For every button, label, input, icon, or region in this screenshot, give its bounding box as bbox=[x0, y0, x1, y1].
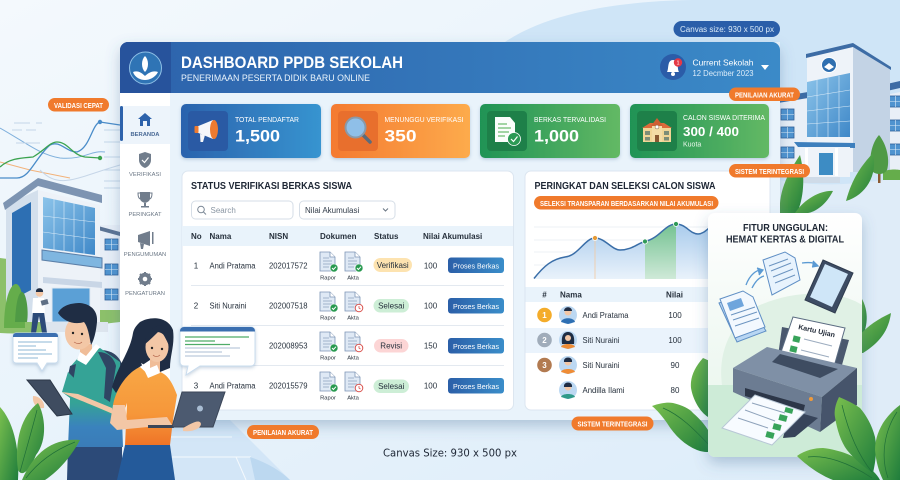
tag: penilaian akurat top: PENILAIAN AKURAT bbox=[735, 92, 795, 99]
subtitle: PENERIMAAN PESERTA DIDIK BARU ONLINE bbox=[181, 73, 370, 84]
chat bubble over table bbox=[180, 327, 255, 375]
table row 2: Rapor bbox=[320, 316, 336, 322]
line chart bbox=[534, 222, 712, 279]
tag: sistem terintegrasi top: SISTEM TERINTEGRASI bbox=[735, 169, 804, 176]
icon: paper document center bbox=[763, 252, 800, 295]
table row 4 bbox=[194, 372, 504, 402]
stat card: calon siswa diterima: 300 / 400 bbox=[683, 124, 739, 139]
table row 4: Proses Berkas bbox=[453, 382, 499, 391]
icon: shield bbox=[139, 152, 151, 168]
stat card: berkas tervalidasi bbox=[480, 104, 620, 158]
table row 1: Verifikasi bbox=[377, 261, 409, 270]
user info: Current Sekolah bbox=[692, 58, 754, 68]
heading bbox=[726, 222, 844, 246]
table row 1: 202017572 bbox=[269, 262, 308, 270]
table row 2: Siti Nuraini bbox=[210, 302, 247, 310]
stat card: berkas tervalidasi: BERKAS TERVALIDASI bbox=[534, 115, 606, 124]
icon: gear bbox=[138, 272, 152, 286]
ranking table header: Nilai bbox=[666, 290, 683, 300]
table row 4: Selesai bbox=[378, 382, 405, 391]
icon: document check bbox=[495, 117, 520, 146]
tablet bbox=[27, 380, 72, 416]
ranking row 4: Andilla Ilami bbox=[582, 386, 625, 395]
subtitle pill bbox=[534, 196, 718, 210]
table row 1: Proses Berkas bbox=[453, 261, 499, 270]
table row 4: 3 bbox=[194, 382, 199, 390]
search box: Search bbox=[210, 206, 236, 215]
label: verifikasi: VERIFIKASI bbox=[129, 172, 161, 178]
ranking row 2: 2 bbox=[542, 336, 547, 345]
arrows bbox=[746, 261, 818, 288]
subtitle pill: SELEKSI TRANSPARAN BERDASARKAN NILAI AKUMULASI bbox=[540, 201, 713, 208]
label: pengumuman: PENGUMUMAN bbox=[124, 252, 166, 258]
table row 1 bbox=[194, 252, 504, 282]
icon: tablet bbox=[805, 260, 853, 313]
tag: validasi cepat: VALIDASI CEPAT bbox=[54, 103, 104, 110]
icon: notification bell bbox=[660, 54, 686, 80]
table row 2 bbox=[194, 292, 504, 322]
tag: penilaian akurat bottom: PENILAIAN AKURAT bbox=[253, 430, 314, 437]
tag: canvas size top bbox=[674, 21, 780, 37]
tag: validasi cepat bbox=[48, 98, 109, 112]
sidebar bbox=[120, 93, 170, 420]
table row 2: 100 bbox=[424, 302, 438, 310]
leaves: bottom right bbox=[797, 397, 900, 480]
ranking row 4 bbox=[559, 381, 680, 399]
ranking row 1: 100 bbox=[668, 311, 682, 320]
icon: printer: Kartu Ujian bbox=[798, 324, 836, 339]
table row 4: Andi Pratama bbox=[210, 382, 256, 390]
heading: PERINGKAT DAN SELEKSI CALON SISWA bbox=[534, 181, 716, 192]
table row 2: Selesai bbox=[378, 302, 405, 310]
chat bubble left bbox=[13, 333, 58, 371]
icon: notification bell: 1 bbox=[676, 60, 680, 66]
tag: penilaian akurat bottom bbox=[247, 425, 319, 439]
table row 4: Akta bbox=[347, 396, 360, 402]
heading: FITUR UNGGULAN: bbox=[743, 222, 828, 234]
table header: NISN bbox=[269, 232, 288, 241]
sleeve and arm bbox=[62, 372, 115, 415]
label: beranda: BERANDA bbox=[130, 132, 160, 138]
ranking row 1 bbox=[537, 306, 682, 324]
table row 3: 202008953 bbox=[269, 342, 308, 350]
table row 1: 1 bbox=[194, 262, 199, 270]
stat card: menunggu verifikasi: 350 bbox=[384, 126, 416, 146]
user info bbox=[692, 58, 769, 78]
table row 1: Rapor bbox=[320, 276, 336, 282]
ranking row 1: Andi Pratama bbox=[582, 311, 629, 320]
ranking table header: Nama bbox=[560, 290, 582, 300]
table row 2: Proses Berkas bbox=[453, 302, 499, 311]
table row 3: Akta bbox=[347, 356, 360, 362]
stat card: berkas tervalidasi: 1,000 bbox=[534, 126, 579, 146]
table header: Dokumen bbox=[320, 232, 357, 241]
table header: No bbox=[191, 232, 202, 241]
left chart backdrop bbox=[0, 120, 120, 188]
panel: fitur unggulan bbox=[708, 213, 862, 457]
table header: Nilai Akumulasi bbox=[423, 232, 482, 241]
stat card: calon siswa diterima bbox=[630, 104, 769, 158]
icon: home bbox=[138, 113, 152, 126]
caption: canvas size: Canvas Size: 930 x 500 px bbox=[383, 448, 517, 460]
search box bbox=[192, 201, 293, 219]
table header bbox=[182, 226, 513, 246]
ranking table header bbox=[526, 287, 770, 302]
output paper bbox=[722, 395, 805, 445]
stat card: total pendaftar: 1,500 bbox=[235, 126, 280, 146]
ranking row 3: 90 bbox=[671, 361, 680, 370]
printer body bbox=[733, 347, 857, 397]
ranking row 3: 3 bbox=[542, 361, 547, 370]
ranking row 4: 80 bbox=[671, 386, 680, 395]
paper input tray bbox=[778, 327, 849, 372]
table row 2: 2 bbox=[194, 302, 199, 310]
table row 1: Andi Pratama bbox=[210, 262, 256, 270]
table row 2: 202007518 bbox=[269, 302, 308, 310]
table row 3: Rapor bbox=[320, 356, 336, 362]
ranking row highlight bbox=[526, 328, 770, 353]
label: pengaturan: PENGATURAN bbox=[125, 291, 165, 297]
table row 3: Revisi bbox=[380, 342, 402, 350]
icon: printer bbox=[722, 317, 857, 445]
icon: school bbox=[642, 118, 672, 142]
illustration: right school building bbox=[778, 43, 900, 213]
ranking row 3: Siti Nuraini bbox=[582, 361, 620, 370]
ranking table header: # bbox=[542, 290, 547, 300]
ranking row 2: Siti Nuraini bbox=[582, 336, 620, 345]
stat card: total pendaftar bbox=[181, 104, 321, 158]
ranking row 2: 100 bbox=[668, 336, 682, 345]
table row 4: Rapor bbox=[320, 396, 336, 402]
tag: sistem terintegrasi bottom: SISTEM TERINTEGRASI bbox=[578, 422, 648, 428]
table row 3: 150 bbox=[424, 342, 438, 350]
header bar bbox=[120, 42, 780, 93]
leaves: behind feature card bbox=[652, 293, 891, 452]
illustration: left school building bbox=[0, 178, 120, 334]
illustration: female student bbox=[110, 318, 225, 480]
table row 3: Proses Berkas bbox=[453, 342, 499, 351]
table row 4: 100 bbox=[424, 382, 438, 390]
tag: penilaian akurat top bbox=[729, 88, 800, 101]
table header: Status bbox=[374, 232, 399, 241]
user info: 12 Decmber 2023 bbox=[692, 69, 754, 78]
panel: peringkat dan seleksi bbox=[525, 171, 770, 410]
table row 1: Akta bbox=[347, 276, 360, 282]
icon: trophy bbox=[138, 192, 152, 208]
ranking row 1: 1 bbox=[542, 311, 547, 320]
icon: magnifier bbox=[346, 118, 370, 142]
dropdown: Nilai Akumulasi bbox=[305, 206, 359, 215]
panel: status verifikasi berkas bbox=[182, 171, 514, 410]
heading: HEMAT KERTAS & DIGITAL bbox=[726, 234, 844, 246]
table header: Nama bbox=[210, 232, 232, 241]
icon: megaphone orange bbox=[194, 120, 218, 142]
panel: dashboard window bbox=[120, 42, 780, 420]
icon: megaphone bbox=[138, 231, 154, 249]
laptop bbox=[172, 392, 225, 427]
ranking row 3 bbox=[537, 356, 680, 374]
title: DASHBOARD PPDB SEKOLAH bbox=[181, 54, 403, 72]
stat card: total pendaftar: TOTAL PENDAFTAR bbox=[235, 115, 299, 124]
illustration: male student bbox=[27, 303, 124, 480]
dropdown bbox=[300, 201, 395, 219]
icon: school logo bbox=[130, 52, 162, 84]
illustration: small standing student bbox=[31, 288, 49, 333]
leaves: bottom left bbox=[0, 403, 80, 480]
tag: sistem terintegrasi top bbox=[729, 164, 810, 178]
heading: STATUS VERIFIKASI BERKAS SISWA bbox=[191, 181, 352, 192]
stat card: menunggu verifikasi bbox=[331, 104, 470, 158]
ranking row 2 bbox=[537, 331, 682, 349]
icon: paper document left bbox=[719, 291, 766, 342]
tag: sistem terintegrasi bottom bbox=[572, 416, 654, 430]
stat card: menunggu verifikasi: MENUNGGU VERIFIKASI bbox=[384, 115, 464, 124]
table row 3 bbox=[269, 332, 504, 362]
stat card: calon siswa diterima: CALON SISWA DITERIMA bbox=[683, 113, 765, 122]
table row 2: Akta bbox=[347, 316, 360, 322]
stat card: calon siswa diterima: Kuota bbox=[683, 142, 701, 148]
table row 1: 100 bbox=[424, 262, 438, 270]
table row 4: 202015579 bbox=[269, 382, 308, 390]
label: peringkat: PERINGKAT bbox=[128, 212, 162, 218]
tag: canvas size top: Canvas size: 930 x 500 px bbox=[680, 25, 774, 34]
